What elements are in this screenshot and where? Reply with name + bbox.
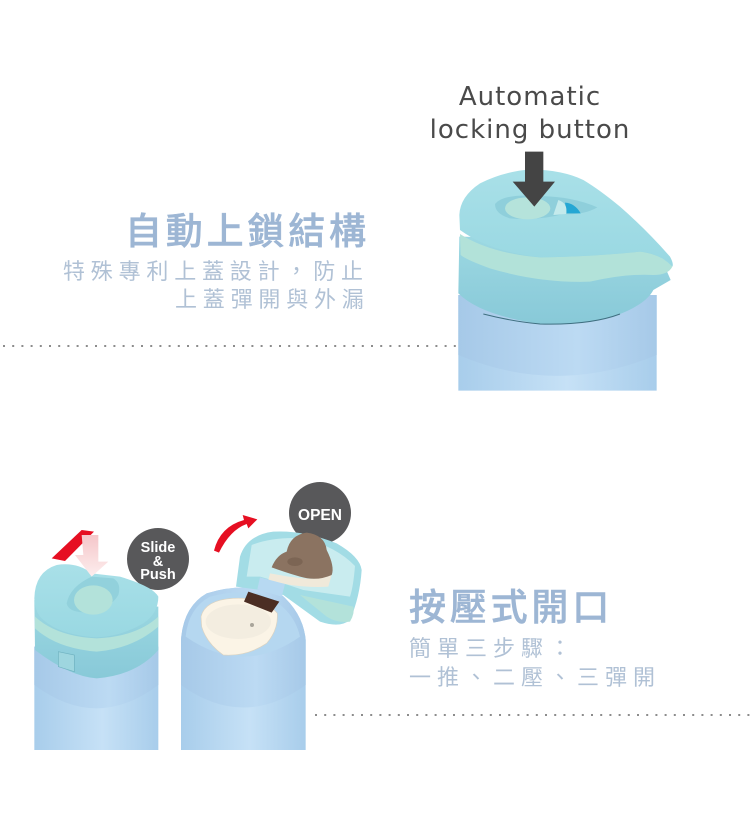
illustration: automatic locking lid on bottle bbox=[458, 152, 673, 391]
badge: slide and push: Push bbox=[140, 567, 176, 583]
illustration: open bottle bbox=[181, 515, 362, 750]
icon: pink down arrow bbox=[75, 535, 108, 577]
mint band on lid bbox=[300, 595, 354, 622]
bottle body bbox=[34, 647, 158, 750]
bottle collar bbox=[458, 295, 657, 376]
icon: red slide arrow bar bbox=[52, 530, 94, 561]
label: automatic locking button bbox=[430, 82, 630, 144]
button recess bbox=[495, 195, 597, 219]
badge: slide and push bbox=[127, 528, 189, 590]
push button bbox=[505, 197, 550, 219]
label: automatic locking button: Automatic bbox=[459, 82, 601, 112]
latch tab bbox=[58, 652, 74, 672]
hinge bbox=[257, 577, 285, 597]
opening gasket bbox=[201, 598, 277, 655]
illustration: closed bottle with slide and push bbox=[34, 530, 158, 750]
button recess bbox=[67, 577, 119, 612]
bottle collar bbox=[34, 647, 158, 708]
lid base band bbox=[34, 600, 158, 678]
blue indicator bbox=[565, 203, 581, 213]
label: automatic locking button: locking button bbox=[430, 114, 630, 144]
text: three steps line 1: 簡單三步驟： bbox=[409, 636, 577, 661]
text: lid description line 1: 特殊專利上蓋設計，防止 bbox=[63, 259, 369, 284]
badge: open bbox=[289, 482, 351, 544]
bottle body bbox=[181, 587, 306, 750]
brown stopper bbox=[272, 533, 333, 579]
heading: automatic lock structure: 自動上鎖結構 bbox=[125, 211, 370, 252]
text: lid description line 2: 上蓋彈開與外漏 bbox=[175, 287, 370, 312]
badge: slide and push: Slide bbox=[141, 540, 175, 556]
push button bbox=[74, 585, 113, 615]
bottle collar bbox=[181, 587, 306, 707]
lid top bbox=[34, 564, 158, 637]
badge: open: OPEN bbox=[298, 507, 342, 524]
shoulder ring bbox=[186, 592, 300, 657]
heading: push to open: 按壓式開口 bbox=[409, 587, 613, 628]
text: three steps line 2: 一推、二壓、三彈開 bbox=[409, 665, 661, 690]
lid mint band bbox=[35, 617, 158, 652]
open lid shell bbox=[236, 531, 362, 625]
badge: slide and push: & bbox=[153, 554, 164, 570]
icon: red curved arrow bbox=[214, 515, 257, 553]
divider: top dotted line bbox=[3, 345, 458, 347]
lid mint band bbox=[460, 234, 672, 282]
bottle body bbox=[458, 295, 657, 391]
icon: down arrow bbox=[513, 152, 555, 207]
divider: bottom dotted line bbox=[315, 714, 750, 716]
dark gasket tab bbox=[244, 592, 279, 613]
seal base bbox=[268, 573, 332, 587]
lid top bbox=[459, 169, 673, 267]
lid base band bbox=[458, 237, 671, 324]
lid interior bbox=[247, 538, 355, 597]
